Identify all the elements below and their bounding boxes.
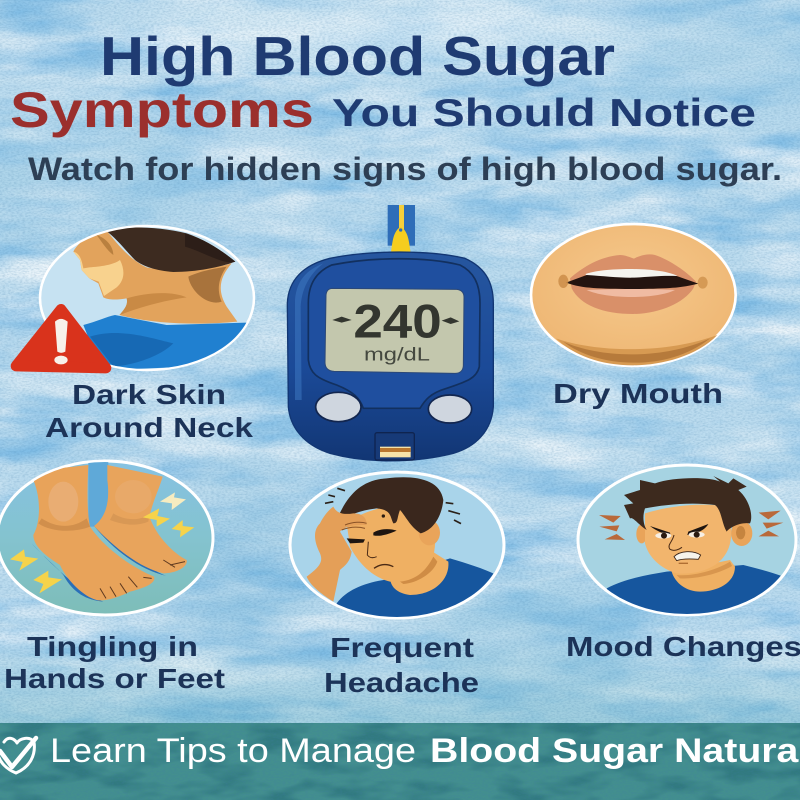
panel: frequent headache — [290, 472, 504, 698]
label: dark skin around neck: Dark Skin — [72, 379, 226, 410]
label: frequent headache — [324, 632, 479, 698]
illustration: angry face — [607, 476, 783, 620]
meter body — [287, 252, 493, 461]
label: tingling in hands or feet: Tingling in — [27, 631, 198, 662]
illustration: mouth — [531, 224, 736, 366]
banner text: Learn Tips to Manage — [50, 732, 416, 770]
title line 1: High Blood Sugar — [100, 25, 615, 87]
title — [10, 25, 756, 138]
subtitle: Watch for hidden signs of high blood sugar. — [28, 151, 782, 187]
illustration: neck — [73, 227, 247, 370]
strip port — [375, 433, 414, 460]
title word: Symptoms: Symptoms — [10, 82, 314, 138]
illustration: headache — [307, 477, 497, 620]
label: dark skin around neck: Around Neck — [45, 412, 254, 443]
meter screen — [325, 288, 464, 373]
panel: glucose meter — [287, 205, 493, 461]
panel: dark skin around neck — [16, 226, 254, 443]
icon: heart check — [0, 738, 36, 773]
label: frequent headache: Frequent — [330, 632, 474, 663]
panel: mood changes — [566, 465, 800, 662]
banner text bold: Blood Sugar Naturally — [430, 732, 800, 770]
icon: pain marks — [325, 488, 461, 524]
icon: warning triangle — [16, 309, 106, 368]
unit mg/dL: mg/dL — [364, 343, 430, 364]
label: dark skin around neck — [45, 379, 254, 443]
label: tingling in hands or feet: Hands or Feet — [4, 663, 225, 694]
label: mood changes: Mood Changes — [566, 631, 800, 662]
illustration: feet — [10, 460, 194, 602]
label: tingling in hands or feet — [4, 631, 225, 694]
label: dry mouth: Dry Mouth — [553, 378, 723, 409]
test strip — [388, 205, 415, 255]
icon: anger marks — [599, 511, 783, 540]
label: frequent headache: Headache — [324, 667, 479, 698]
meter buttons — [316, 392, 472, 423]
title line 2: You Should Notice — [332, 92, 756, 135]
reading 240: 240 — [353, 296, 442, 349]
panel: dry mouth — [531, 224, 736, 409]
panel: tingling in hands or feet — [0, 460, 225, 694]
banner: bottom call to action — [0, 723, 800, 800]
